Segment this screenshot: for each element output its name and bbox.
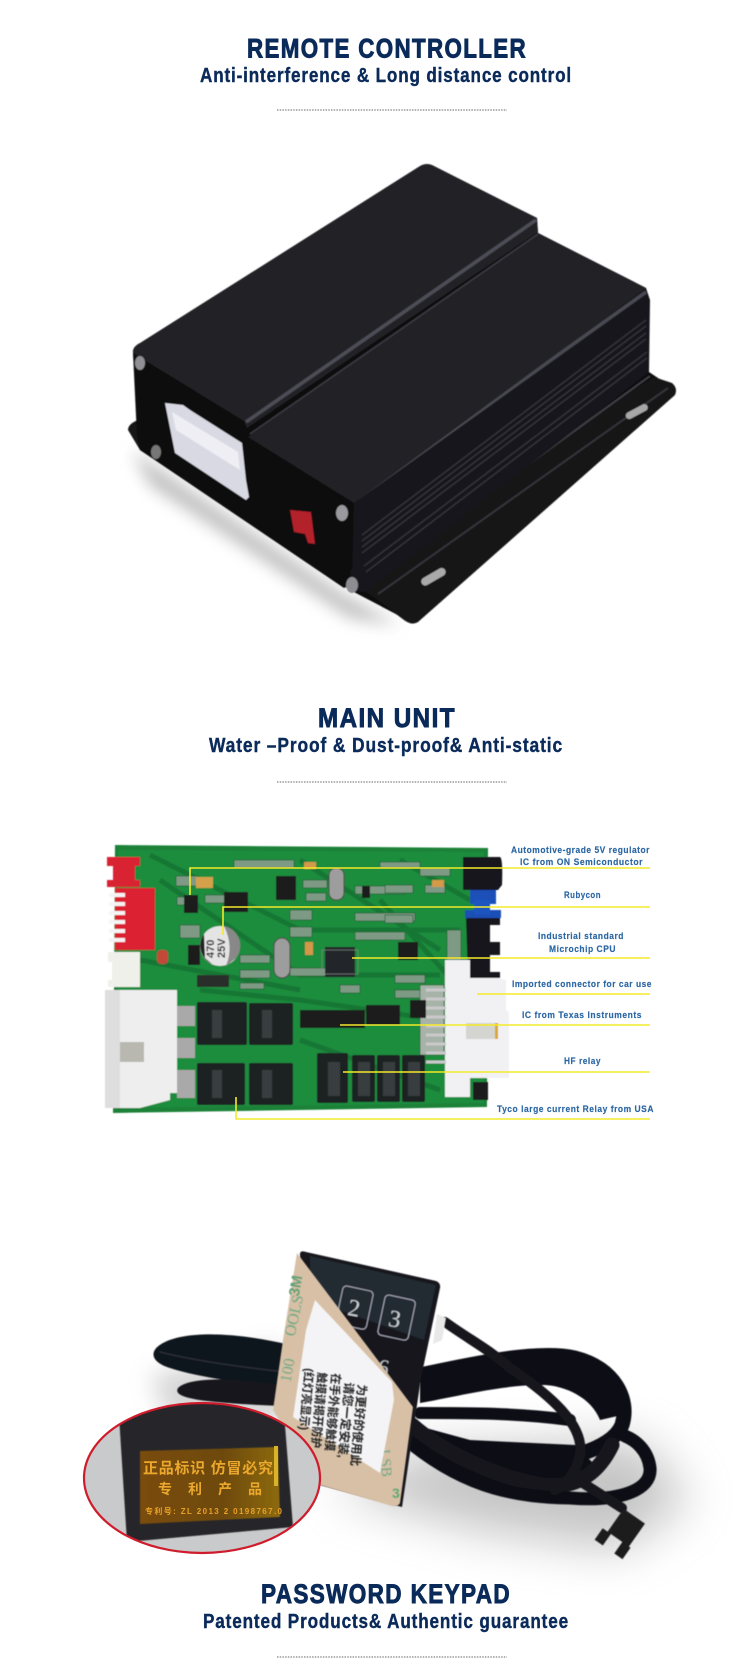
callout labels: [497, 845, 654, 1115]
electrolytic capacitor: 25V: [216, 938, 228, 958]
peeled adhesive backing: OOLS: [282, 1293, 307, 1338]
right coil strands: [415, 1355, 624, 1462]
title: REMOTE CONTROLLER: [247, 34, 527, 64]
corner screws: [135, 356, 145, 370]
CPU chip: [325, 947, 355, 977]
green PCB: [113, 845, 488, 1113]
black glass keypad panel: [300, 1251, 440, 1507]
keypad plug connector: [595, 1505, 647, 1559]
crystal oscillators: [329, 868, 344, 900]
key 6: 6: [376, 1354, 391, 1380]
black keypad corner: [118, 1400, 293, 1542]
peeled adhesive backing: 3: [392, 1485, 400, 1501]
subtitle: Patented Products& Authentic guarantee: [203, 1611, 569, 1633]
white board connector: [426, 960, 509, 1100]
circuit board photo: [105, 845, 654, 1119]
white instruction label: 请您一定安装,: [335, 1382, 357, 1459]
relay markings: [212, 1010, 420, 1098]
subtitle: Anti-interference & Long distance control: [200, 65, 572, 87]
title: MAIN UNIT: [318, 703, 456, 733]
lower top face: [248, 233, 646, 503]
product photo: black aluminium controller box: [128, 164, 676, 625]
sticker text: 正品标识 仿冒必究: [143, 1459, 273, 1477]
section heading: main unit: [209, 703, 563, 782]
black relays: [197, 1002, 425, 1105]
title: PASSWORD KEYPAD: [261, 1579, 511, 1609]
magnified inset: authenticity label: 专利号: ZL 2013 2 0198767.0: [145, 1506, 283, 1516]
callout labels: IC from Texas Instruments: [522, 1010, 642, 1021]
subtitle: Water –Proof & Dust-proof& Anti-static: [209, 735, 563, 757]
black glass keypad panel: 2: [346, 1295, 362, 1323]
white instruction label: (红灯亮显示): [297, 1368, 317, 1431]
section heading: password keypad: [203, 1579, 569, 1657]
SMD components: [176, 860, 461, 1055]
callout labels: Tyco large current Relay from USA: [497, 1104, 654, 1115]
magnified inset: authenticity label: 专 利 产 品: [158, 1481, 262, 1497]
flange mounting slots: [625, 403, 649, 420]
white instruction label: 触摸请揭开防护: [308, 1372, 330, 1449]
right coil: lower solid bundle: [415, 1425, 600, 1495]
white connector: [165, 403, 249, 500]
black and blue edge connectors: [463, 857, 502, 978]
key 2: [335, 1285, 374, 1330]
callout labels: HF relay: [564, 1056, 601, 1067]
mounting flange: [128, 377, 676, 624]
callout labels: Rubycon: [564, 890, 601, 901]
peeled adhesive backing: [273, 1253, 413, 1506]
right side face with cooling ribs: [352, 288, 650, 592]
soft photo shadows: [150, 1345, 690, 1550]
callout labels: Automotive-grade 5V regulator: [511, 845, 650, 856]
left coil: [154, 1334, 290, 1392]
white instruction label: 为更好的使用此: [348, 1384, 370, 1467]
yellow callout lines: [190, 868, 650, 1119]
peeled adhesive backing: 3M: [286, 1274, 306, 1298]
soft drop shadow: [132, 450, 400, 625]
keypad wire plug: [433, 1314, 446, 1344]
electrolytic capacitor: [200, 926, 240, 966]
key 3: [377, 1294, 416, 1341]
callout labels: Microchip CPU: [549, 944, 616, 955]
red terminal connector: [107, 857, 155, 950]
section heading: remote controller: [200, 34, 572, 110]
tantalum capacitors: [196, 877, 213, 888]
small white connector: [108, 952, 140, 987]
black glass keypad panel: 3: [387, 1306, 403, 1334]
peeled adhesive backing: LSB: [376, 1449, 394, 1478]
peeled adhesive backing: 100: [278, 1357, 299, 1384]
red connector: [290, 510, 315, 544]
magnified inset: authenticity label: [84, 1400, 320, 1553]
integrated circuits: [184, 876, 426, 1028]
box silhouette: [133, 164, 676, 623]
right coil: upper solid bundle: [420, 1355, 622, 1420]
gold hologram sticker: [140, 1447, 280, 1524]
callout labels: Imported connector for car use: [512, 979, 652, 990]
callout labels: IC from ON Semiconductor: [520, 857, 643, 868]
white instruction label: [293, 1300, 394, 1473]
front face: [133, 353, 350, 588]
large white connector: [105, 990, 195, 1108]
raised top face: [133, 164, 538, 428]
electrolytic capacitor: 470: [205, 940, 217, 958]
keypad photo: [84, 1251, 690, 1559]
white instruction label: 在手外能够触摸: [322, 1373, 344, 1452]
callout labels: Industrial standard: [538, 931, 624, 942]
coiled black cables: [154, 1322, 650, 1508]
